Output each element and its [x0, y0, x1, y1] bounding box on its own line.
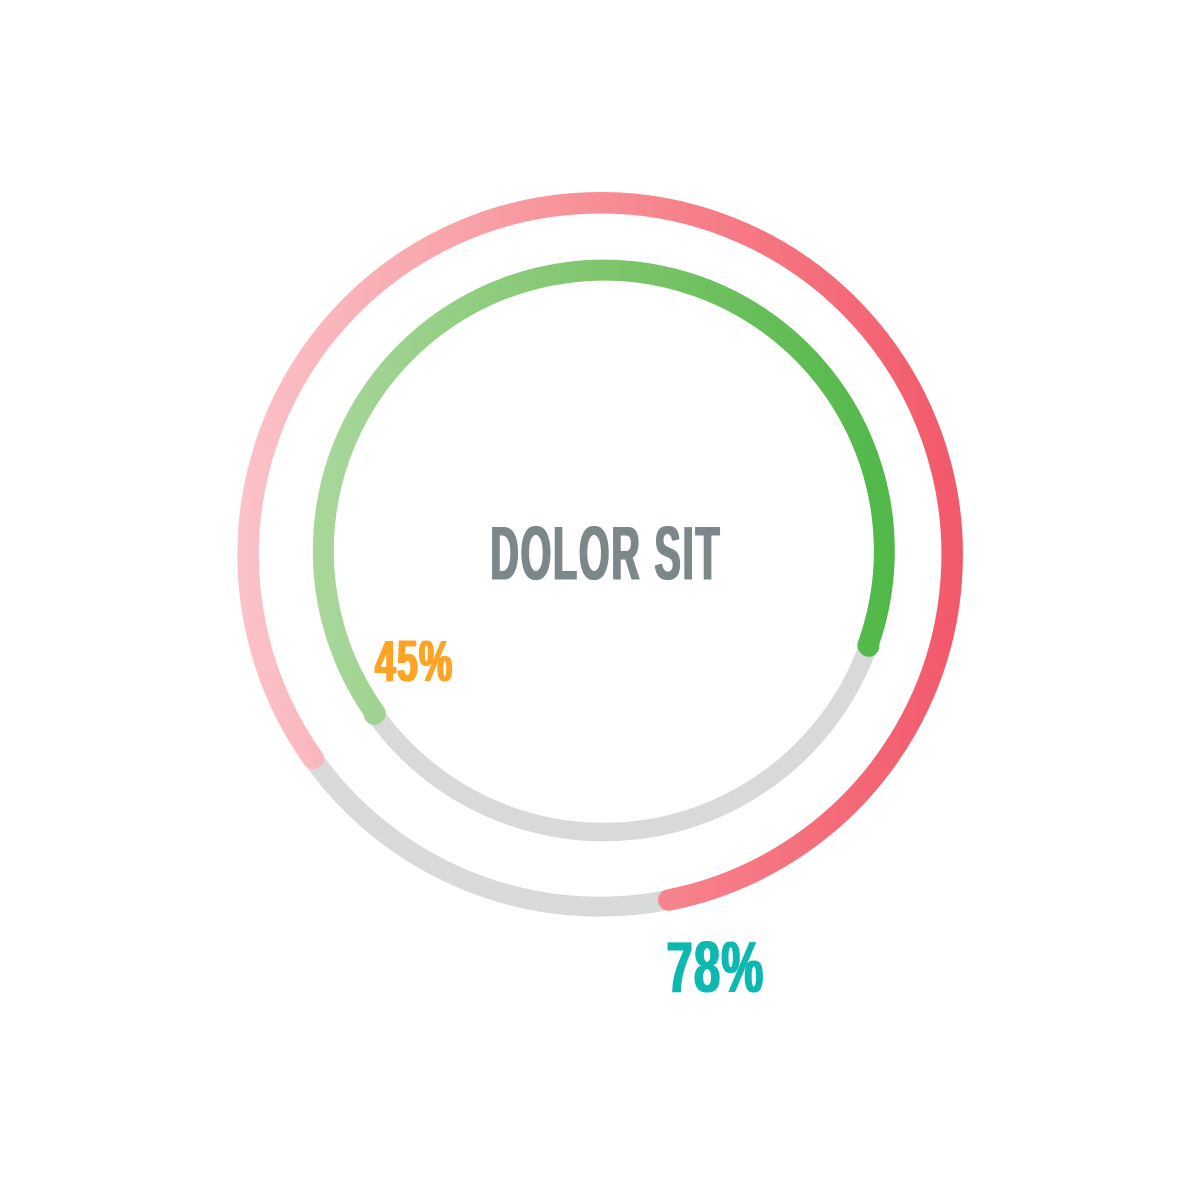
inner ring: 45% progress — [323, 270, 884, 832]
inner ring value: 45% — [375, 629, 454, 694]
inner ring track — [374, 645, 868, 832]
outer ring value: 78% — [666, 928, 764, 1008]
outer ring red arc — [248, 203, 952, 900]
center title: DOLOR SIT — [490, 512, 722, 596]
outer ring track — [312, 758, 669, 907]
outer ring: 78% progress — [248, 203, 952, 907]
inner ring green arc — [323, 270, 884, 714]
